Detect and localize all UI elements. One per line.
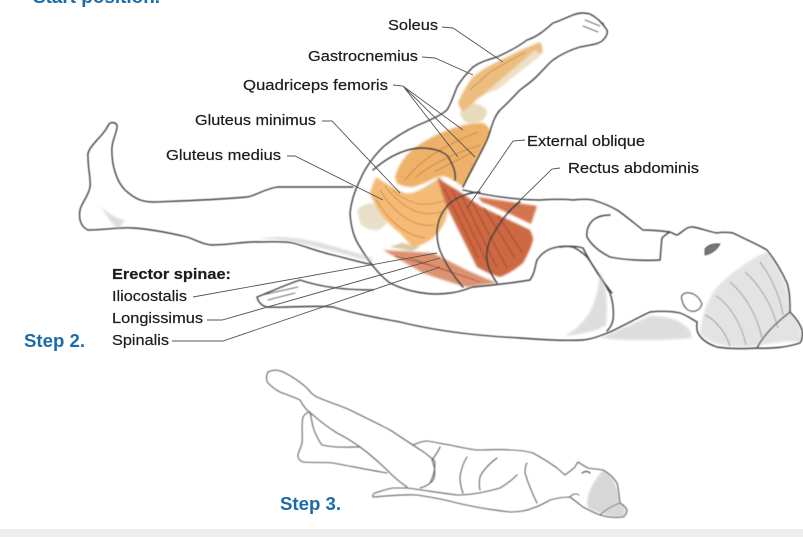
shorts and bra lines bbox=[430, 447, 537, 503]
label: Gluteus minimus bbox=[195, 113, 400, 193]
hip muscle contour bbox=[373, 148, 455, 180]
hair shading bbox=[700, 252, 801, 347]
label: External oblique bbox=[467, 134, 645, 208]
toes bbox=[583, 15, 604, 32]
label: Iliocostalis: Iliocostalis bbox=[112, 289, 187, 305]
hand fingers bbox=[262, 287, 298, 300]
torso and head bbox=[373, 441, 627, 517]
lower leg bbox=[298, 412, 387, 473]
bone: lower pelvis bbox=[390, 243, 420, 251]
label: Gluteus medius bbox=[166, 148, 383, 200]
arm bbox=[257, 280, 583, 340]
label: Spinalis: Spinalis bbox=[112, 333, 169, 349]
label: Gluteus minimus: Gluteus minimus bbox=[195, 113, 316, 129]
eye and nose bbox=[705, 244, 720, 255]
muscle: erector spinae bbox=[383, 250, 497, 287]
muscle: quadriceps femoris bbox=[395, 123, 490, 187]
muscle: gluteus bbox=[370, 177, 448, 247]
raised leg bbox=[266, 370, 435, 488]
label: Rectus abdominis bbox=[507, 161, 699, 213]
bottom band bbox=[0, 529, 803, 537]
label: Soleus bbox=[388, 18, 503, 62]
torso and head bbox=[463, 190, 802, 349]
label: Longissimus: Longissimus bbox=[112, 311, 203, 327]
bone: tibia bbox=[484, 50, 541, 94]
label group: Erector spinae bbox=[112, 253, 440, 349]
bone: femur head bbox=[405, 177, 450, 205]
bun bbox=[757, 312, 790, 348]
label: Gastrocnemius bbox=[308, 49, 473, 75]
hair strands bbox=[705, 262, 783, 346]
label: Rectus abdominis: Rectus abdominis bbox=[568, 161, 699, 177]
label: Quadriceps femoris bbox=[243, 78, 475, 157]
label: Gluteus medius: Gluteus medius bbox=[166, 148, 281, 164]
erector spinae heading: Erector spinae: bbox=[112, 267, 231, 283]
label: Quadriceps femoris: Quadriceps femoris bbox=[243, 78, 388, 94]
label: Spinalis bbox=[112, 267, 440, 349]
raised leg bbox=[350, 13, 607, 294]
body shading bbox=[100, 205, 692, 340]
figure: step 3 illustration bbox=[266, 370, 627, 517]
label: Soleus: Soleus bbox=[388, 18, 438, 34]
muscle: rectus abdominis bbox=[478, 197, 537, 224]
figure: step 2 anatomy illustration bbox=[80, 13, 802, 349]
face detail bbox=[582, 472, 590, 473]
heading: Step 3: Step 3. bbox=[280, 494, 341, 514]
muscle: lower leg bbox=[458, 42, 542, 112]
label: Longissimus bbox=[112, 258, 440, 327]
straight leg bbox=[80, 123, 373, 265]
muscles and bones bbox=[357, 42, 542, 287]
waist contours bbox=[437, 192, 480, 287]
hair shading bbox=[587, 470, 626, 517]
bone: hip bbox=[357, 203, 387, 230]
label: External oblique: External oblique bbox=[527, 134, 645, 150]
torso side and bra bbox=[473, 246, 613, 331]
muscle fibres bbox=[376, 52, 525, 282]
muscle: external oblique bbox=[437, 177, 533, 277]
step 3 outline bbox=[266, 370, 627, 517]
label: Iliocostalis bbox=[112, 253, 437, 305]
body outline bbox=[80, 13, 802, 349]
label: Gastrocnemius: Gastrocnemius bbox=[308, 49, 418, 65]
bone: knee bbox=[460, 103, 487, 123]
ear bbox=[681, 293, 702, 311]
heading: Step 2: Step 2. bbox=[24, 331, 85, 351]
